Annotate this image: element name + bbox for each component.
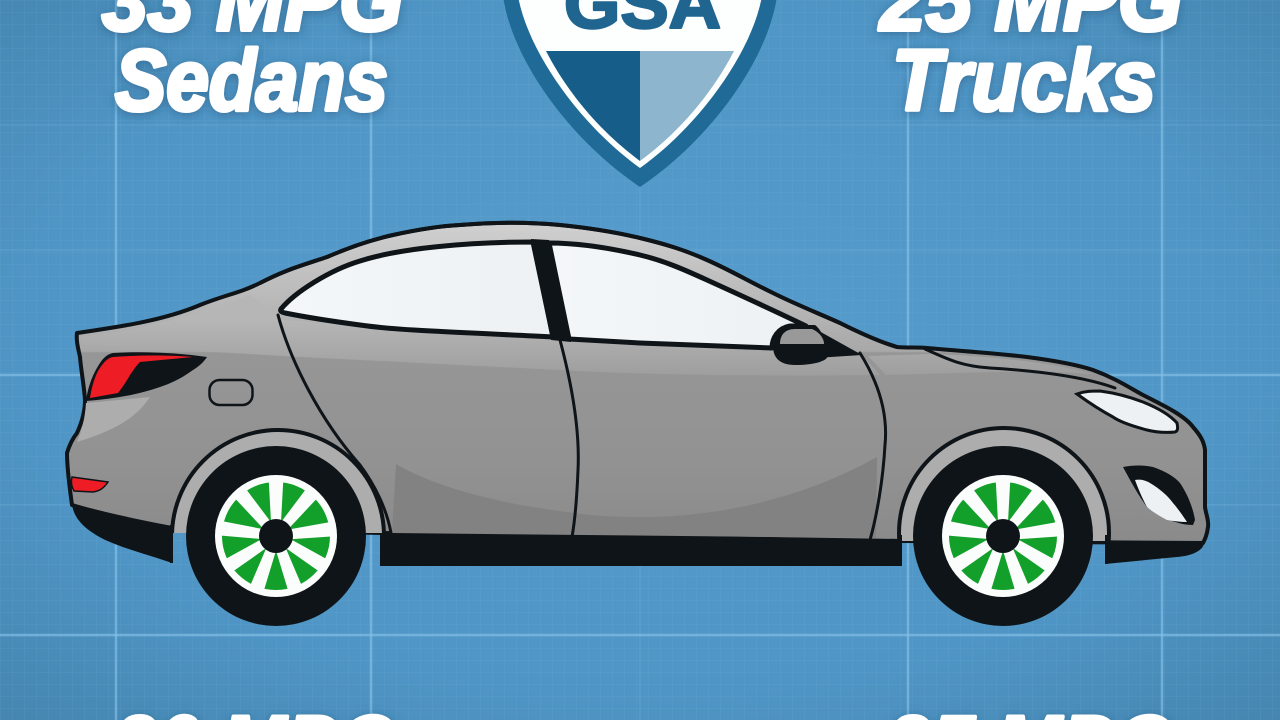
rear reflector [71, 477, 108, 492]
car body shell [67, 223, 1208, 543]
rear wheel arch [170, 428, 386, 533]
front fog lamp vent [1123, 466, 1195, 525]
heading: 33 MPG Sedans: Sedans [115, 33, 388, 129]
arch end strokes [170, 525, 1108, 566]
side mirror [773, 325, 828, 365]
icon: GSA shield [503, 0, 777, 187]
door seams [278, 315, 1115, 540]
front wheel arch [897, 426, 1111, 541]
shoulder highlight band [80, 295, 880, 375]
rear wheel [186, 446, 366, 626]
mirror mount [800, 326, 862, 358]
lower body shadow sweep [392, 457, 877, 538]
front window glass [549, 243, 806, 348]
heading: 33 MPG Sedans [102, 0, 403, 129]
black lower trim and sill [72, 505, 1204, 566]
illustration: grey sedan side view [67, 223, 1208, 642]
headlight [1077, 391, 1178, 432]
rear bumper highlight [77, 397, 150, 442]
heading: 25 MPG Trucks [878, 0, 1182, 129]
fuel door [210, 380, 252, 405]
heading: 25 MPG Trucks: Trucks [892, 33, 1156, 129]
window pillar [531, 239, 571, 342]
front wheel [913, 446, 1093, 626]
rear window glass [281, 242, 553, 337]
roof outline repaint [260, 223, 897, 347]
rear tail light [86, 352, 207, 401]
